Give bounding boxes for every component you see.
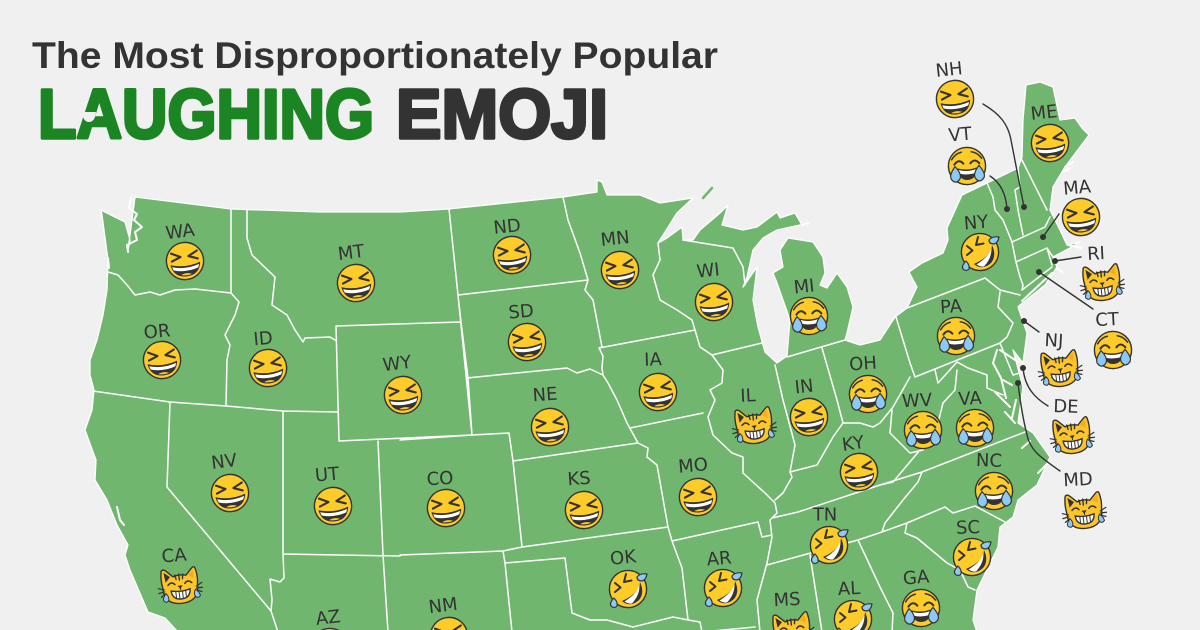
MT xyxy=(335,241,377,304)
SD: SD xyxy=(508,300,535,324)
Isle Royale xyxy=(703,188,712,198)
NV xyxy=(209,450,251,514)
title xyxy=(32,35,718,153)
state borders xyxy=(93,160,1053,630)
state labels and emoji xyxy=(141,58,1133,630)
CO xyxy=(425,468,467,529)
title word: LAUGHING: LAUGHING xyxy=(38,75,374,153)
MT: MT xyxy=(337,241,367,265)
CA: CA xyxy=(161,544,188,568)
SD xyxy=(506,300,548,363)
ME: ME xyxy=(1030,101,1059,125)
MD xyxy=(1060,469,1108,531)
WA xyxy=(164,220,206,282)
AL: AL xyxy=(837,578,861,600)
WV: WV xyxy=(901,390,933,412)
NC xyxy=(974,450,1014,511)
leader: RI xyxy=(1055,257,1081,261)
GA: GA xyxy=(902,566,931,590)
OK: OK xyxy=(609,546,638,570)
leader dots xyxy=(1004,204,1058,386)
AL xyxy=(834,578,872,630)
leader: CT xyxy=(1039,272,1093,309)
WV xyxy=(901,390,943,450)
VT xyxy=(947,123,987,186)
CA xyxy=(156,544,204,606)
map land xyxy=(85,82,1089,630)
OR xyxy=(141,320,183,381)
ND: ND xyxy=(492,215,522,239)
VA: VA xyxy=(958,388,983,410)
NM: NM xyxy=(427,594,459,618)
NJ xyxy=(1036,330,1084,389)
TN xyxy=(810,504,848,564)
NY xyxy=(961,211,999,271)
leader: MD xyxy=(1018,383,1060,471)
leader: MA xyxy=(1043,214,1059,237)
AZ xyxy=(310,606,350,630)
title line: subtitle: The Most Disproportionately Popular xyxy=(32,35,718,76)
leader: DE xyxy=(1023,368,1048,406)
MN: MN xyxy=(600,227,631,251)
SC xyxy=(953,517,991,576)
NH xyxy=(934,58,976,120)
PA xyxy=(936,296,976,356)
KS xyxy=(563,468,605,531)
MA xyxy=(1060,176,1102,238)
NJ: NJ xyxy=(1044,330,1064,352)
UT xyxy=(312,463,354,527)
CO: CO xyxy=(426,468,454,490)
CT xyxy=(1093,309,1133,370)
SC: SC xyxy=(956,517,980,539)
OR: OR xyxy=(143,320,171,344)
VA xyxy=(955,388,995,448)
DE: DE xyxy=(1053,396,1079,418)
ME xyxy=(1029,101,1071,164)
CT: CT xyxy=(1095,309,1120,331)
KY: KY xyxy=(841,432,867,456)
MI xyxy=(789,275,829,336)
IN xyxy=(788,376,830,438)
title word: EMOJI: EMOJI xyxy=(396,75,608,153)
OK xyxy=(609,546,647,608)
WY xyxy=(382,352,424,416)
RI: RI xyxy=(1087,243,1106,265)
PA: PA xyxy=(939,296,963,318)
IL: IL xyxy=(740,385,756,407)
leader: NJ xyxy=(1024,321,1039,332)
NV: NV xyxy=(210,450,239,474)
MO: MO xyxy=(677,454,709,478)
KS: KS xyxy=(567,468,591,490)
MN xyxy=(599,227,641,291)
KY xyxy=(838,432,880,493)
VT: VT xyxy=(948,123,974,146)
WA: WA xyxy=(164,220,197,244)
IL xyxy=(730,385,778,446)
leader lines xyxy=(983,104,1093,471)
leader: VT xyxy=(990,176,1007,209)
NE: NE xyxy=(532,384,558,406)
NY: NY xyxy=(963,211,990,235)
MA: MA xyxy=(1062,176,1093,200)
map of US states xyxy=(85,82,1089,630)
OH xyxy=(848,353,888,414)
IA: IA xyxy=(644,349,663,371)
AR: AR xyxy=(706,547,732,571)
coastal waters: Puget Sound, Chesapeake Bay, Long Island Sound, Outer Banks, San Francisco Bay xyxy=(108,162,1081,525)
AZ: AZ xyxy=(315,606,342,630)
NE xyxy=(529,384,571,448)
OH: OH xyxy=(849,353,878,375)
GA xyxy=(901,566,941,628)
UT: UT xyxy=(314,463,341,487)
WY: WY xyxy=(382,352,414,376)
DE xyxy=(1048,396,1096,456)
MS: MS xyxy=(773,589,801,611)
MI: MI xyxy=(793,275,816,299)
IN: IN xyxy=(794,376,815,398)
NH: NH xyxy=(935,58,964,82)
NC: NC xyxy=(976,450,1002,472)
TN: TN xyxy=(812,504,837,526)
RI xyxy=(1078,243,1126,303)
IA xyxy=(637,349,679,413)
ID xyxy=(247,328,289,389)
ND xyxy=(491,215,533,276)
WI xyxy=(693,259,735,323)
ID: ID xyxy=(253,328,274,350)
MO xyxy=(677,454,719,518)
MS xyxy=(768,589,816,630)
AR xyxy=(704,547,742,607)
WI: WI xyxy=(696,259,721,283)
MD: MD xyxy=(1063,469,1093,491)
NM xyxy=(427,594,470,630)
leader: NH xyxy=(983,104,1024,207)
